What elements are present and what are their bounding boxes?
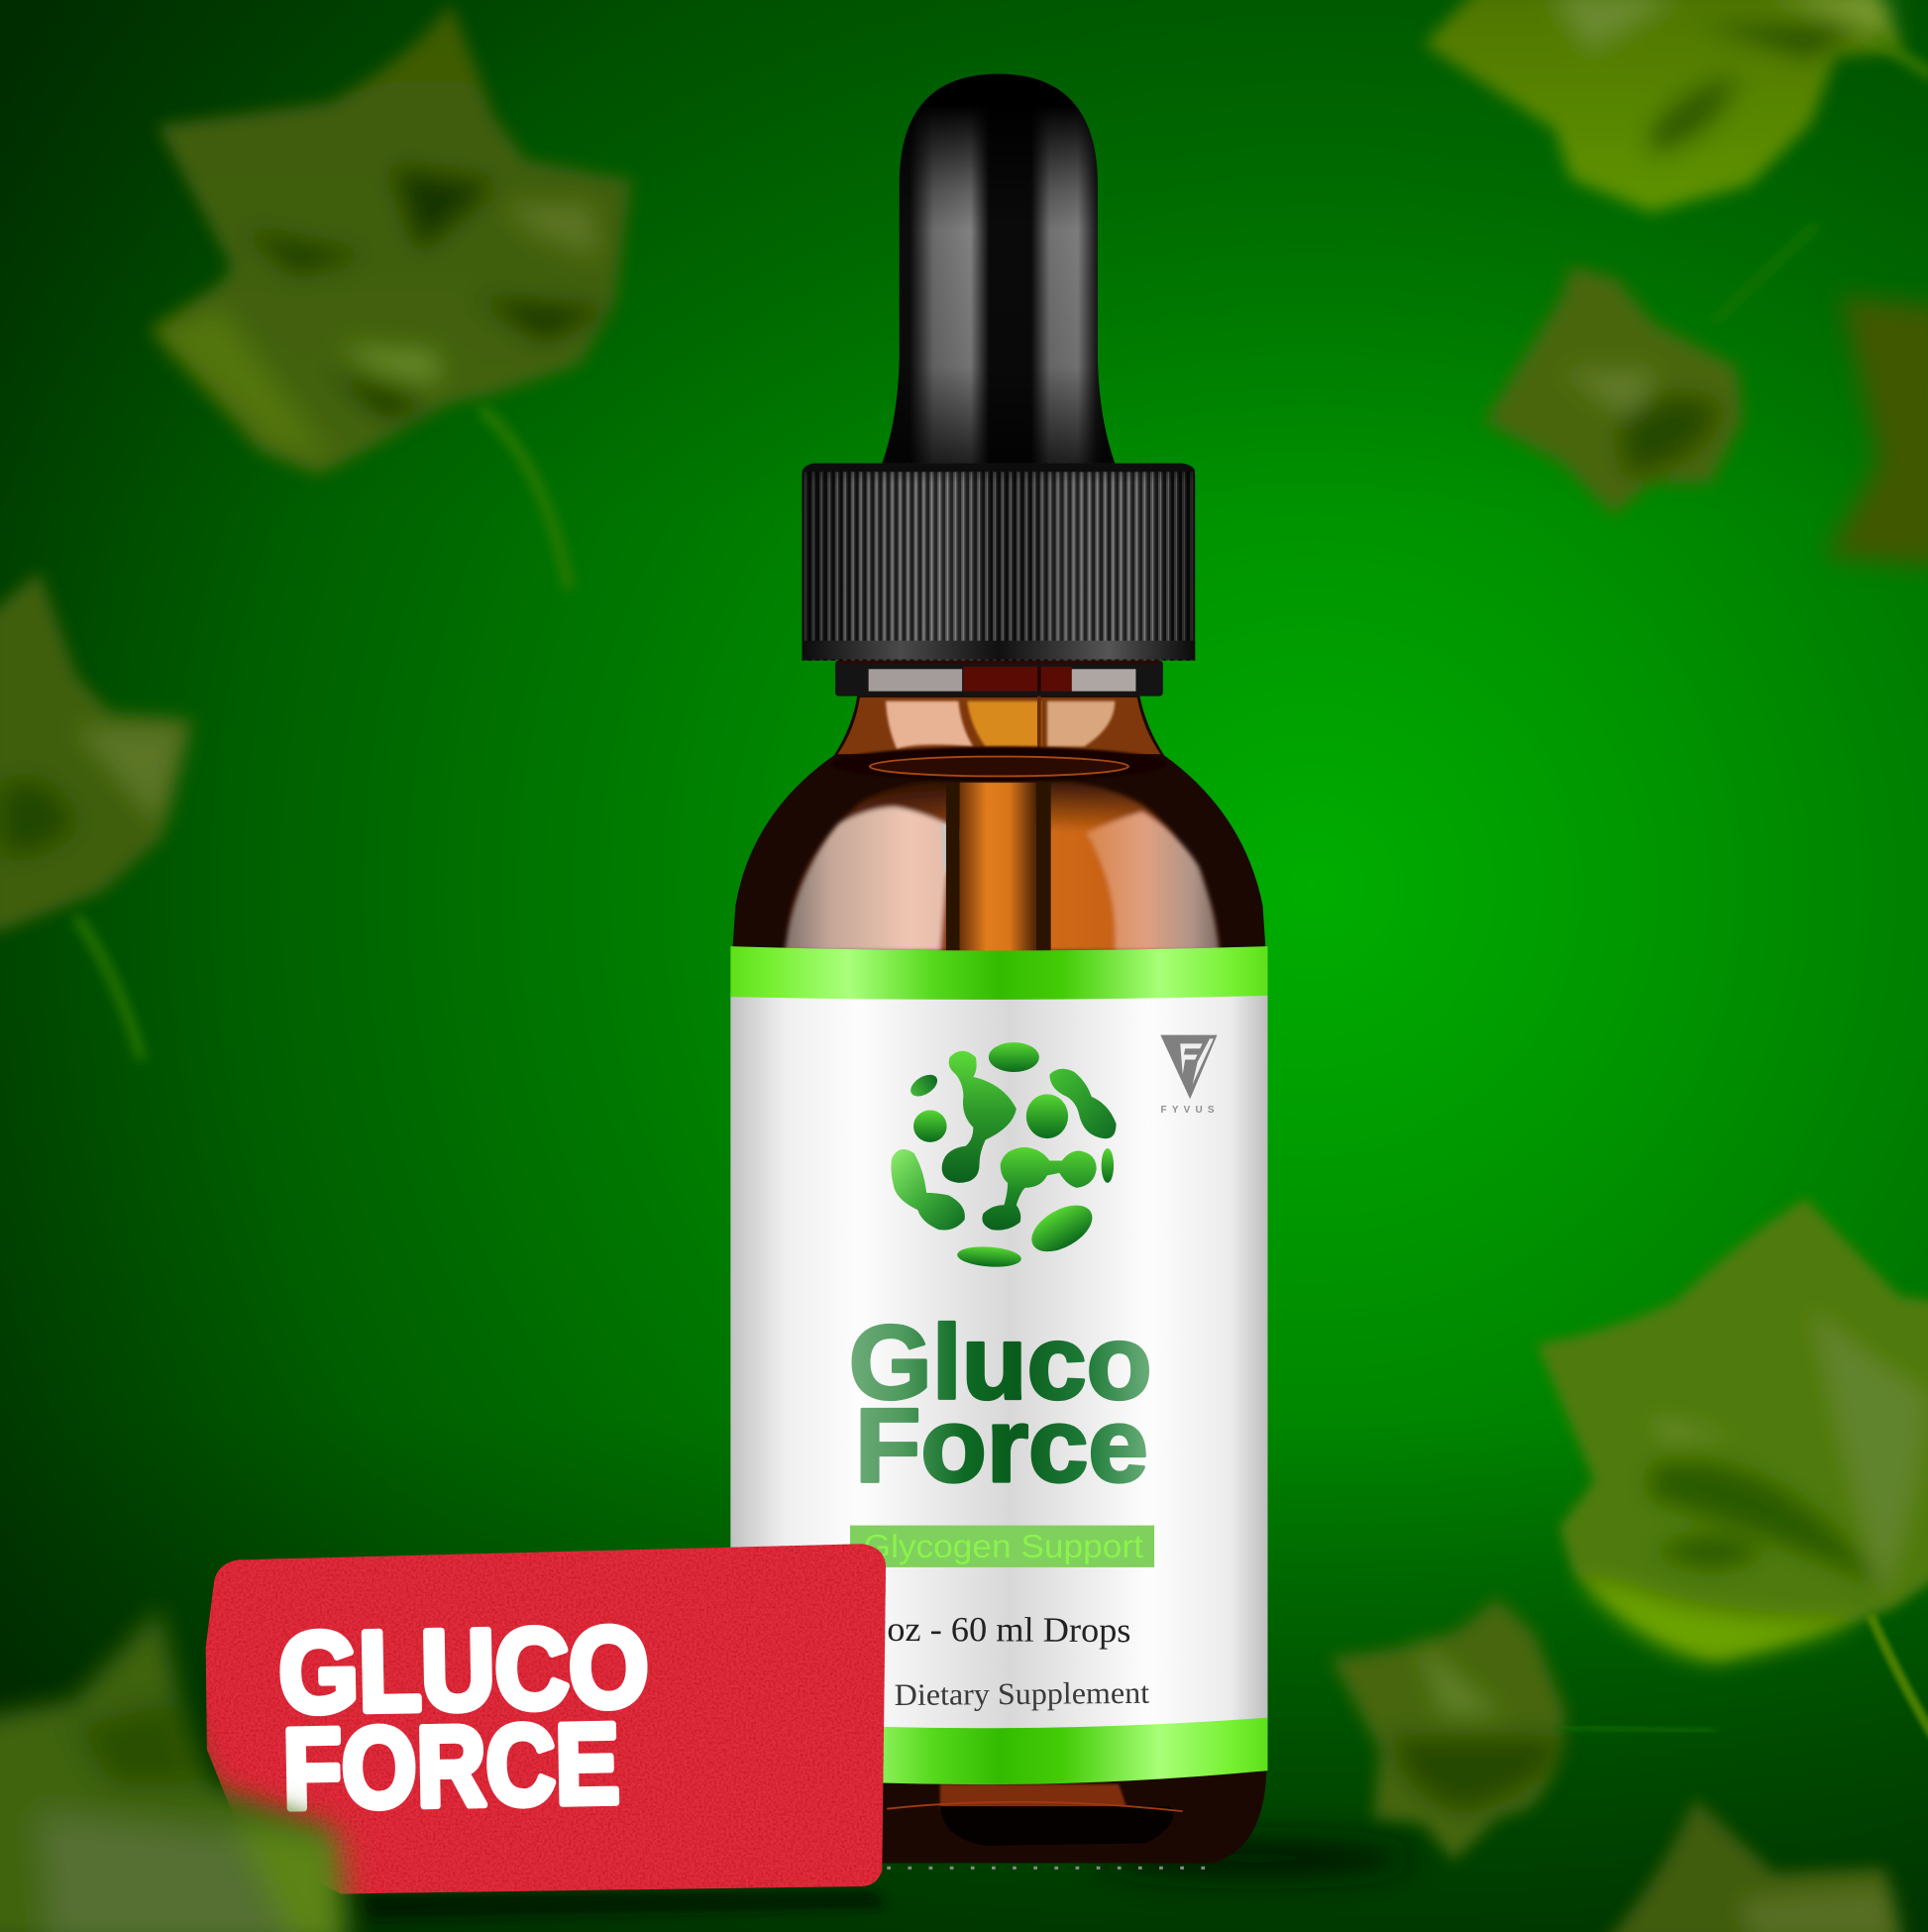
brand logo: FYVUS bbox=[1160, 1035, 1220, 1116]
bottle bbox=[730, 74, 1268, 1868]
leaf stem: top left bbox=[481, 409, 569, 589]
bottom green band bbox=[730, 1718, 1268, 1784]
dropper tube bbox=[946, 783, 960, 951]
glass body bbox=[730, 695, 1266, 1868]
brand logo: FYVUS: FYVUS bbox=[1161, 1105, 1220, 1116]
liquid line bbox=[831, 747, 1167, 781]
neck amber bbox=[838, 698, 1160, 754]
product name bbox=[849, 1305, 1152, 1504]
leaf: bottom right corner bbox=[1601, 1799, 1903, 1932]
leaf: left bbox=[0, 572, 192, 931]
shadow beneath red tag bbox=[358, 1891, 887, 1917]
leaf: bottom right large bbox=[1538, 1199, 1928, 1661]
right highlight bbox=[1087, 812, 1219, 951]
dropper bulb bbox=[882, 74, 1115, 464]
product name: Gluco bbox=[849, 1305, 1152, 1422]
tag wordmark bbox=[277, 1604, 651, 1833]
leaf stem: left bbox=[76, 916, 142, 1060]
leaf: right middle bbox=[1484, 267, 1743, 515]
shadow beneath bottle bbox=[1097, 1838, 1417, 1878]
label white panel bbox=[730, 993, 1268, 1733]
label bbox=[730, 946, 1268, 1784]
ribbed cap bbox=[802, 464, 1195, 661]
leaf: top left bbox=[151, 4, 632, 475]
leaf: far right bbox=[1826, 295, 1928, 567]
tag wordmark: FORCE bbox=[282, 1700, 620, 1833]
volume text: oz - 60 ml Drops bbox=[887, 1609, 1131, 1650]
supplement text: Dietary Supplement bbox=[895, 1675, 1150, 1712]
leaf: top right bbox=[1424, 0, 1904, 212]
molecule logo bbox=[891, 1042, 1117, 1269]
left highlight bbox=[785, 807, 963, 951]
product name: Force bbox=[855, 1387, 1148, 1504]
leaf: bottom left foreground bbox=[0, 1608, 348, 1932]
amber body bbox=[785, 781, 1220, 951]
red tag bbox=[206, 1544, 886, 1893]
leaf: bottom middle right bbox=[1331, 1598, 1564, 1861]
top green band bbox=[730, 946, 1268, 1000]
neck ring bbox=[835, 659, 1163, 697]
leaf stem: bottom middle right bbox=[1558, 1728, 1715, 1731]
tag wordmark: GLUCO bbox=[277, 1604, 650, 1737]
glycogen support strip: Glycogen Support bbox=[864, 1529, 1144, 1565]
leaf stem: top right bbox=[1873, 37, 1928, 76]
base of bottle bbox=[789, 1780, 1256, 1863]
leaf stem: bottom right bbox=[1871, 1614, 1928, 1738]
leaf stem: right middle bbox=[1712, 224, 1817, 323]
